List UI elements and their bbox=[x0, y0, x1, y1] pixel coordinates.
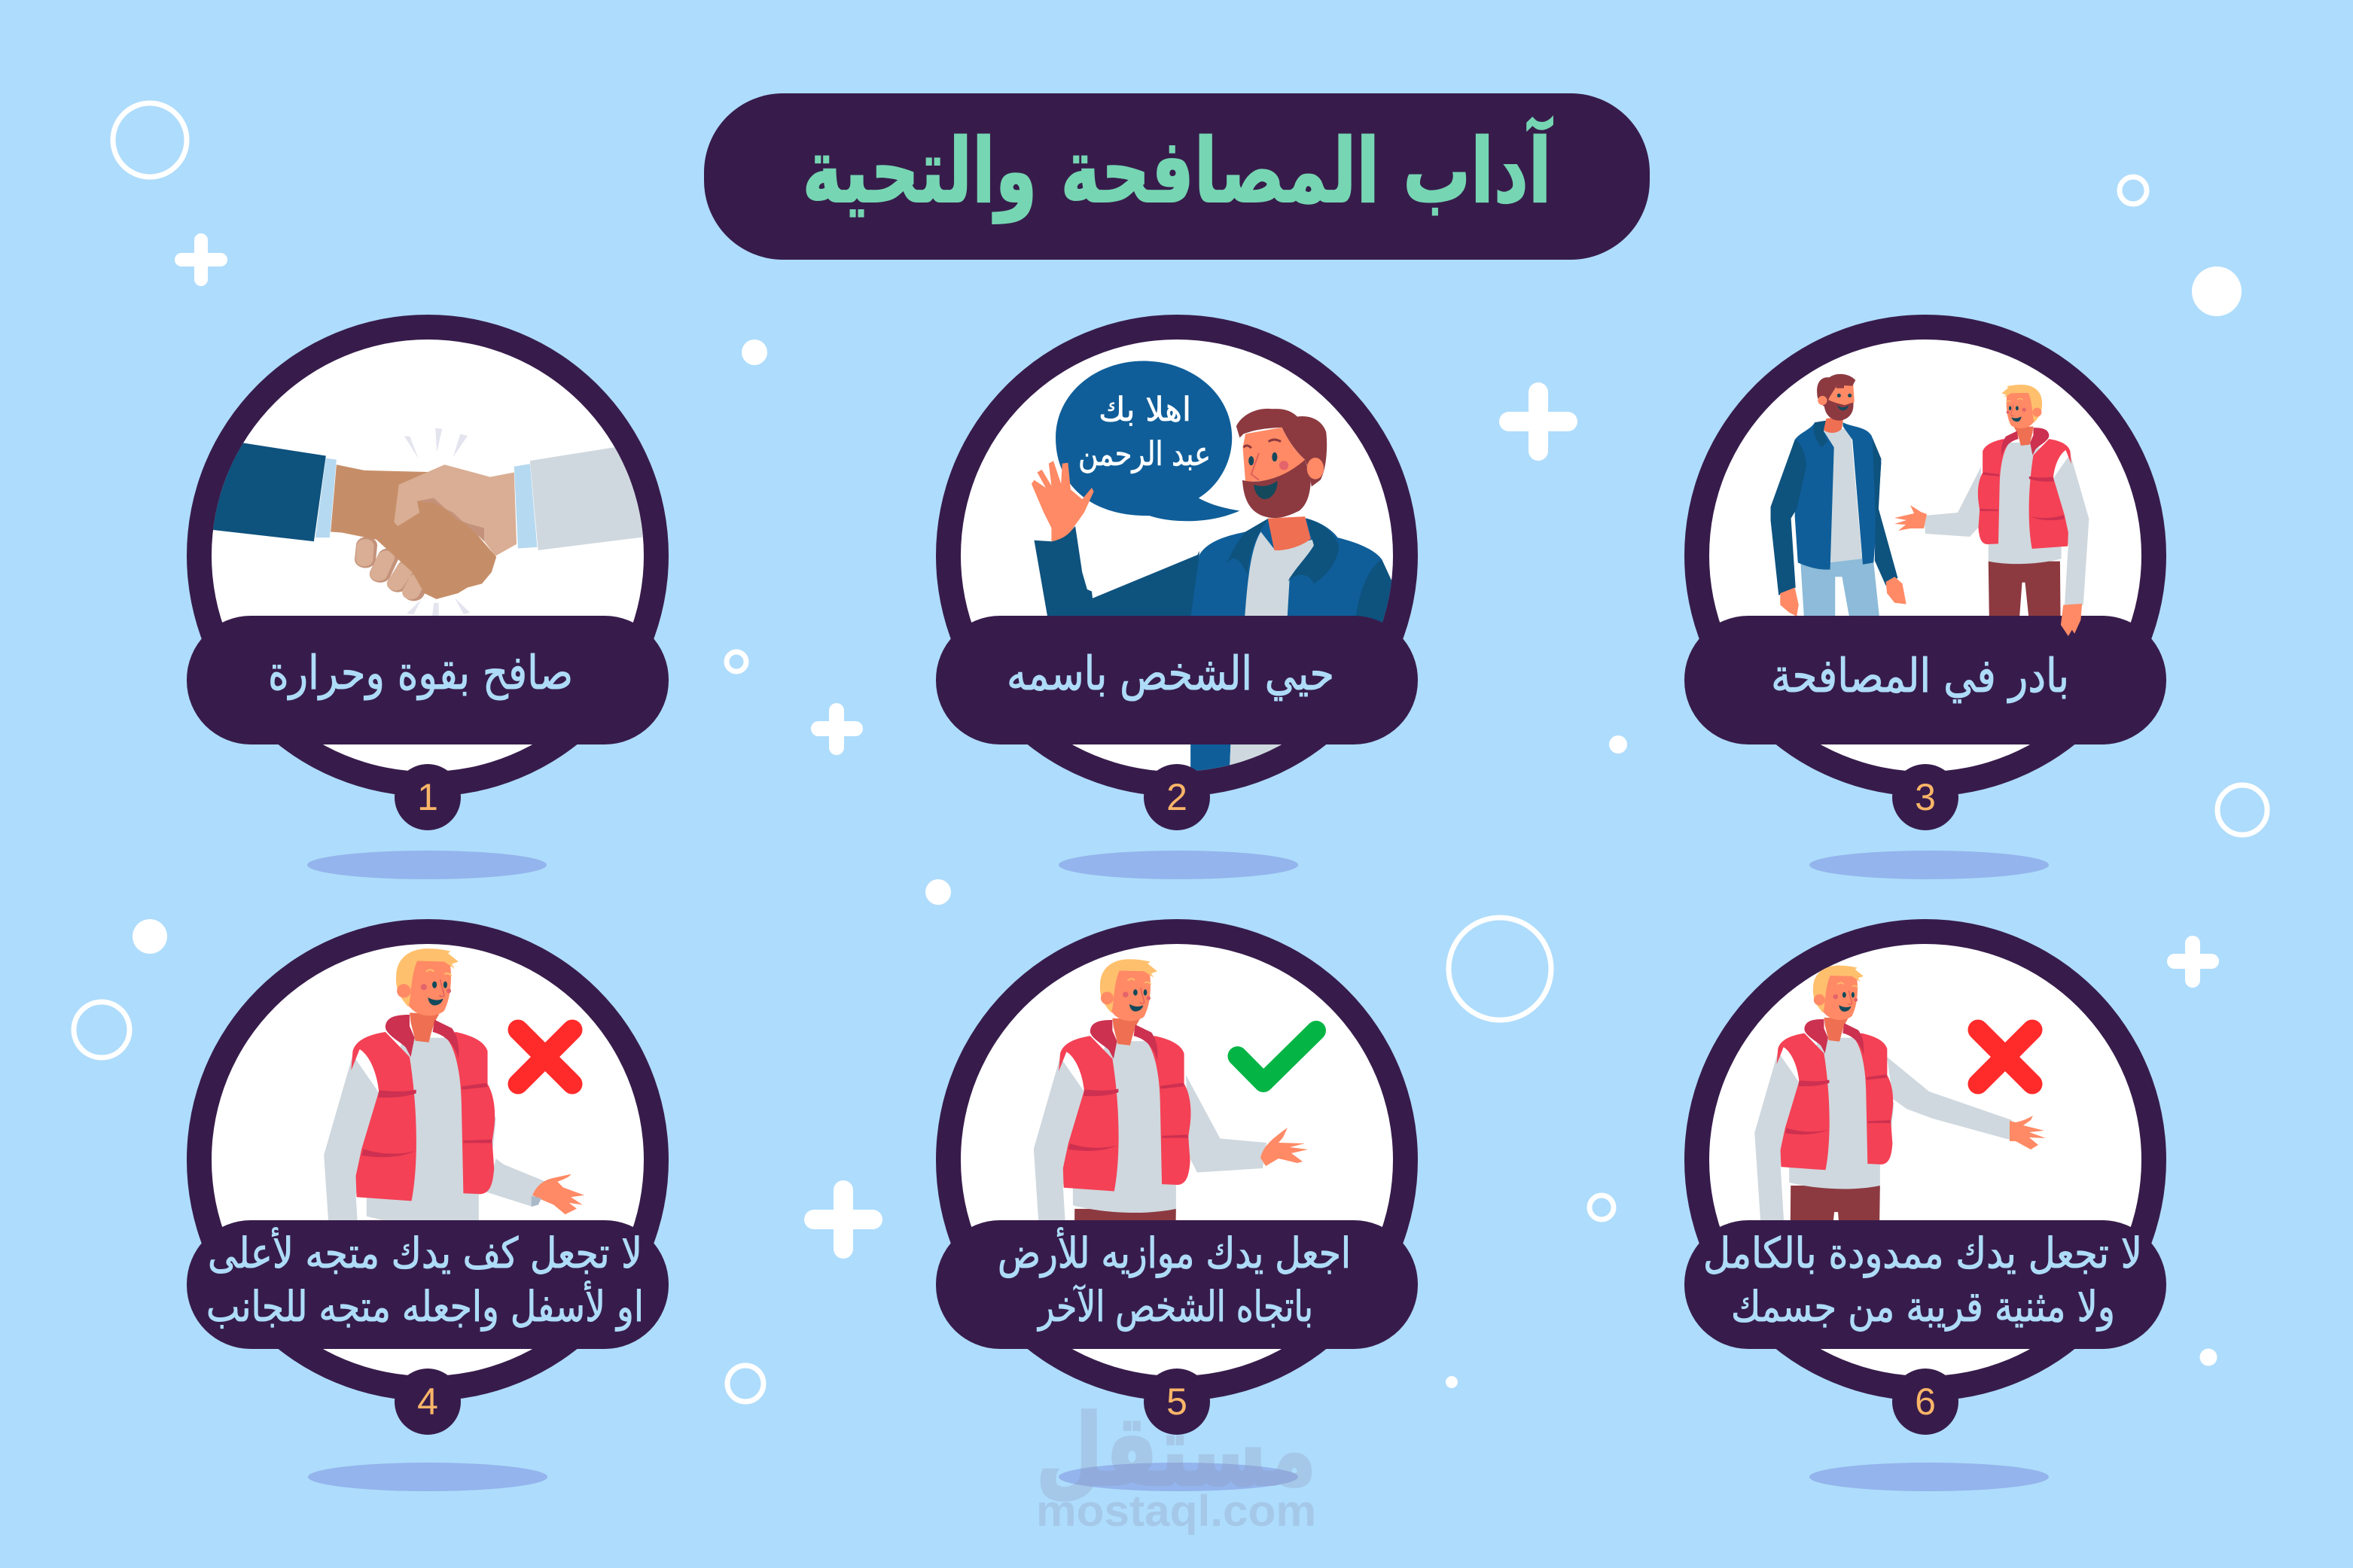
caption bbox=[1703, 1229, 2142, 1332]
speech bubble text: اهلا بك bbox=[1099, 391, 1191, 429]
number: 5 bbox=[1166, 1381, 1187, 1423]
number: 2 bbox=[1166, 776, 1187, 818]
floor shadows bbox=[307, 851, 2049, 1491]
caption: لا تجعل يدك ممدودة بالكامل bbox=[1703, 1229, 2142, 1278]
title text: آداب المصافحة والتحية bbox=[803, 117, 1553, 224]
illustration: man with correct arm bbox=[1033, 959, 1308, 1220]
speech bubble text bbox=[1078, 391, 1211, 473]
icon: red cross bbox=[518, 1030, 572, 1084]
number: 6 bbox=[1915, 1381, 1936, 1423]
watermark: مستقل bbox=[1036, 1393, 1316, 1508]
illustration: waving man with speech bubble bbox=[1032, 361, 1399, 776]
caption: بادر في المصافحة bbox=[1771, 648, 2069, 703]
number badge bbox=[395, 764, 461, 830]
panel 5: hand parallel to ground bbox=[936, 919, 1418, 1435]
watermark: mostaql.com bbox=[1036, 1487, 1316, 1536]
decorative circles and plus signs bbox=[74, 103, 2267, 1402]
caption: اجعل يدك موازيه للأرض bbox=[998, 1227, 1351, 1278]
number: 4 bbox=[417, 1381, 438, 1423]
panel 4: palm not up or down bbox=[187, 919, 669, 1435]
number: 3 bbox=[1915, 776, 1936, 818]
caption: ولا مثنية قريبة من جسمك bbox=[1731, 1283, 2115, 1332]
illustration: two men bbox=[1771, 373, 2089, 616]
panel 2: greet person by name bbox=[936, 315, 1418, 830]
caption bar bbox=[936, 1220, 1418, 1349]
caption bar bbox=[1684, 616, 2166, 744]
illustration: man with low arm bbox=[324, 948, 584, 1220]
caption bar bbox=[936, 616, 1418, 744]
hanging hand over bar bbox=[2061, 604, 2082, 636]
number badge bbox=[1892, 1369, 1958, 1435]
caption: او لأسفل واجعله متجه للجانب bbox=[206, 1280, 644, 1332]
panel 1: firm warm handshake bbox=[179, 315, 669, 830]
number badge bbox=[395, 1369, 461, 1435]
caption: باتجاه الشخص الآخر bbox=[1037, 1283, 1313, 1332]
icon: red cross bbox=[1978, 1030, 2032, 1084]
caption: لا تجعل كف يدك متجه لأعلى bbox=[208, 1227, 642, 1278]
caption bar bbox=[1684, 1220, 2166, 1349]
number badge bbox=[1144, 764, 1210, 830]
illustration: man with straight arm bbox=[1754, 965, 2046, 1220]
caption: حيي الشخص باسمه bbox=[1007, 646, 1334, 701]
caption: صافح بقوة وحرارة bbox=[268, 645, 573, 700]
panel 6: arm not fully stretched nor bent bbox=[1684, 919, 2166, 1435]
panel 3: take initiative in handshake bbox=[1684, 315, 2166, 830]
man in blue jacket bbox=[1771, 374, 1906, 624]
man in red vest with outstretched arm bbox=[1894, 385, 2089, 616]
number badge bbox=[1892, 764, 1958, 830]
illustration: handshake bbox=[213, 428, 643, 616]
title banner bbox=[704, 93, 1650, 260]
number: 1 bbox=[417, 776, 438, 818]
caption bar bbox=[187, 1220, 669, 1349]
caption bbox=[206, 1227, 644, 1332]
watermark bbox=[1036, 1393, 1316, 1536]
caption bbox=[998, 1227, 1351, 1332]
speech bubble text: عبد الرحمن bbox=[1078, 435, 1211, 473]
caption bar bbox=[187, 616, 669, 744]
icon: green check bbox=[1238, 1031, 1316, 1082]
number badge bbox=[1144, 1369, 1210, 1435]
